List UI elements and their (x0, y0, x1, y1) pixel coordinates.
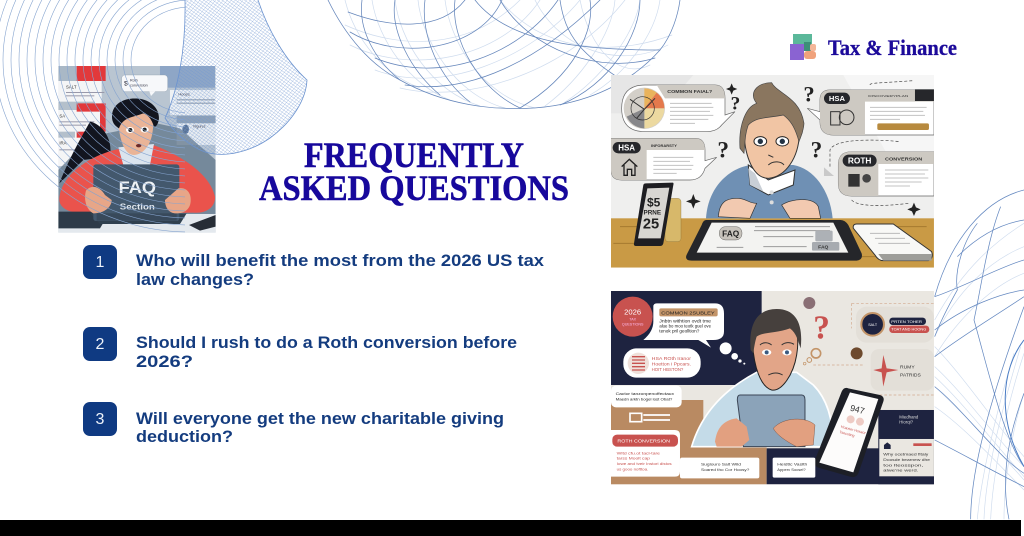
bubble: HSA document: DISCOVERYPLAN (868, 94, 908, 98)
bubble: HSA document (807, 89, 934, 135)
bubble: HSA Roth (623, 348, 701, 378)
text: medicaid: Miedhand (899, 414, 919, 419)
card: Roth conversion: Witd cfu.ot tacl-tare (617, 450, 661, 455)
badge: 2026 tax questions: TAX (629, 318, 637, 322)
card: rumy patrids: RUMY (900, 364, 915, 370)
callout: bottom left question: Suglouro Salt Wild (701, 462, 741, 467)
phone: price display (634, 183, 681, 246)
callout: bottom right question: Apperv Socsel? (777, 467, 806, 472)
phone: on table (853, 224, 932, 261)
logo: Tax & Finance: Tax & Finance (828, 35, 957, 60)
figure: man with tablet (692, 309, 833, 447)
card: SALT: TOAT AND HOONG (891, 328, 927, 332)
figure: red sweater (59, 145, 215, 214)
tablet: FAQ (686, 220, 862, 261)
card: rumy patrids: PATRIDS (900, 373, 922, 379)
figure: person (706, 83, 833, 218)
question 3: 3 (96, 411, 105, 428)
phone: result screen: Tsecuting (839, 430, 855, 438)
callout: bottom left question (680, 458, 759, 478)
question 3: Will everyone get the new charitable giving (136, 410, 504, 428)
bubble: common difficulty: tenok pril geolltion? (659, 328, 700, 333)
bubble: common faial (622, 85, 735, 132)
card: SALT: PRTEN TOHER (891, 320, 922, 324)
bubble: common difficulty: alue bo moo teotk guel ove (659, 323, 712, 328)
illustration: worried person holding FAQ tablet (58, 66, 216, 233)
icon: logo mark (790, 34, 816, 60)
phone: result screen (815, 388, 884, 477)
tablet: FAQ section (93, 164, 179, 221)
title: FREQUENTLY (304, 135, 524, 175)
phone: price display: 25 (643, 217, 659, 233)
illustration: worried person holding FAQ tablet: Hoops (178, 91, 190, 96)
card: note: too lteosspon, (883, 462, 923, 467)
bubble: HSA inforarsty: INFORARSTY (651, 143, 677, 148)
question 2: Should I rush to do a Roth conversion before (136, 334, 517, 352)
bubble: Roth conversion: ROTH (848, 156, 871, 166)
badge: 2026 tax questions: QUESTIONS (622, 323, 644, 327)
callout: tax question: Maedn arktn bogel lost Obat? (616, 396, 673, 401)
bubble: Roth conversion (838, 152, 934, 196)
card: Roth conversion: us gooo nofttoa. (617, 467, 648, 472)
callout: bottom right question (773, 458, 815, 478)
icons: question marks: ? (803, 82, 815, 107)
bubble: common faial: COMMON FAIAL? (667, 89, 713, 94)
card: Roth conversion: tarss Moolt cap (617, 456, 651, 461)
bubble: HSA Roth: HSA ROth Iranor (652, 356, 692, 361)
callout: roth conversion: Roth (130, 78, 138, 82)
decorative mesh: top-left fine lattice (160, 0, 310, 160)
bubble: HSA document: HSA (829, 94, 846, 103)
icons: question marks: ? (811, 137, 822, 163)
illustration: person with tablet and phone, navy and tan layout (611, 291, 934, 484)
text: medicaid second line: Hiorqi? (899, 420, 914, 425)
illustration: worried person holding FAQ tablet: Figures (193, 125, 206, 129)
tablet: FAQ: FAQ (722, 228, 740, 238)
callout: roth conversion: conversion (130, 84, 148, 88)
bubble: Roth conversion: CONVERSION (885, 156, 922, 161)
phone: result screen: 947 (849, 403, 866, 416)
card: Roth conversion: Iowe and tveir Instori distos (617, 461, 672, 466)
callout: roth conversion (122, 75, 168, 96)
question 1: law changes? (136, 271, 254, 289)
question 2 (83, 327, 517, 371)
card: note: Doosde bearnew dhe (883, 457, 931, 462)
decorative mesh: top-center bowl (328, 0, 680, 109)
question 2: 2 (96, 336, 105, 353)
badge: 2026 tax questions: 2026 (624, 307, 641, 316)
phone: price display: $5 (647, 196, 661, 210)
question 1 (83, 245, 545, 289)
bubble: HSA inforarsty: HSA (618, 143, 635, 152)
bubble: HSA Roth: HOIT HBSTON? (652, 367, 684, 372)
card: rumy patrids (871, 349, 934, 391)
callout: tax question: Cactor tanzonpenoffectaux (616, 391, 674, 396)
illustration: worried person holding FAQ tablet: SA (59, 113, 65, 118)
decorative mesh: top-left contour lines (0, 0, 185, 232)
footer bar (0, 520, 1021, 536)
card: SALT: SALT (868, 323, 878, 327)
card: note: alwe'ne werd. (883, 468, 918, 473)
question 3 (83, 402, 504, 446)
callout: bottom right question: Heidtlc Vaslth (777, 462, 807, 467)
icons: question marks: ? (717, 137, 729, 163)
question 2: 2026? (136, 353, 193, 371)
figure: head and hair (118, 113, 154, 155)
bubble: common difficulty: COMMON 2SUBLEY (661, 310, 715, 316)
card: note: Why ocetmaed fitaly (883, 452, 928, 457)
callout: roth conversion: $ (124, 80, 128, 87)
tablet: FAQ: FAQ (818, 244, 829, 250)
illustration: worried person holding FAQ tablet: IRA (59, 140, 67, 145)
callout: tax question (611, 386, 682, 407)
decorative mesh: right side (935, 190, 1024, 519)
card: Roth conversion (611, 430, 680, 477)
title: ASKED QUESTIONS (259, 168, 569, 208)
card: SALT (856, 307, 934, 343)
icons: question marks: ? (731, 93, 740, 114)
badge: 2026 tax questions (613, 297, 653, 337)
phone: price display: PRNE (644, 209, 661, 216)
question 1: Who will benefit the most from the 2026 US tax (136, 252, 545, 270)
icons: question marks (718, 87, 821, 158)
card: note (879, 439, 934, 476)
card: Roth conversion: ROTH CONVERSION (617, 439, 670, 445)
bubble: HSA Roth: Hoetton i Ppcars. (652, 361, 691, 366)
tablet: FAQ section: Section (120, 202, 155, 212)
bubble: common difficulty (643, 303, 724, 348)
callout: bottom left question: Soared tho Cor Hoosy? (701, 467, 750, 472)
phone: result screen: Hoaxter Hoxaor (840, 425, 867, 435)
tablet: FAQ section: FAQ (119, 178, 156, 197)
illustration: person with question marks and HSA / Roth bubbles (611, 75, 934, 268)
illustration: worried person holding FAQ tablet: SALT (66, 84, 77, 89)
bubble: common difficulty: Jnbtn withtion ovdt tme (659, 318, 712, 323)
icon: question mark: ? (813, 309, 830, 346)
title (259, 135, 569, 208)
bubble: HSA inforarsty (611, 138, 717, 180)
question 1: 1 (96, 254, 105, 271)
question 3: deduction? (136, 428, 233, 446)
